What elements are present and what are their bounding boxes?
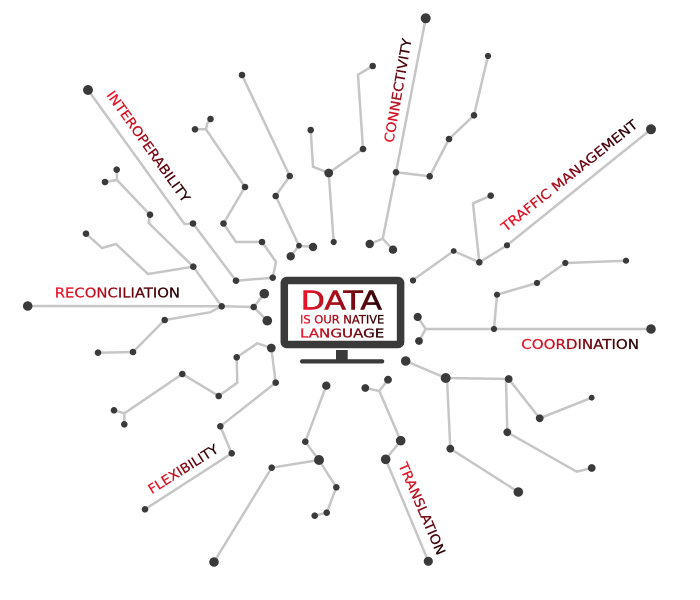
branch: flexibility — [111, 343, 279, 513]
label: interoperability: INTEROPERABILITY — [103, 89, 193, 206]
branch: traffic management — [410, 124, 656, 284]
icon: computer monitor — [284, 280, 401, 364]
branch: upper left tree — [239, 72, 317, 260]
branch: reconciliation — [23, 166, 272, 356]
branch: top centre tree — [307, 63, 376, 245]
label: coordination: COORDINATION — [521, 338, 639, 353]
monitor subhead: IS OUR NATIVE — [300, 312, 384, 326]
monitor headline: DATA — [301, 286, 383, 316]
branch: bottom centre tree — [209, 382, 340, 567]
label: connectivity: CONNECTIVITY — [382, 36, 416, 144]
label: traffic management: TRAFFIC MANAGEMENT — [498, 117, 642, 236]
branch: connectivity — [366, 13, 491, 254]
label: translation: TRANSLATION — [394, 460, 447, 558]
label: reconciliation: RECONCILIATION — [55, 286, 180, 302]
branch: interoperability — [83, 85, 276, 284]
label: flexibility: FLEXIBILITY — [146, 442, 222, 498]
monitor word: language: LANGUAGE — [300, 325, 384, 340]
branch: coordination — [414, 258, 656, 345]
branch: lower right tree — [401, 356, 596, 497]
branch: translation — [361, 376, 433, 566]
